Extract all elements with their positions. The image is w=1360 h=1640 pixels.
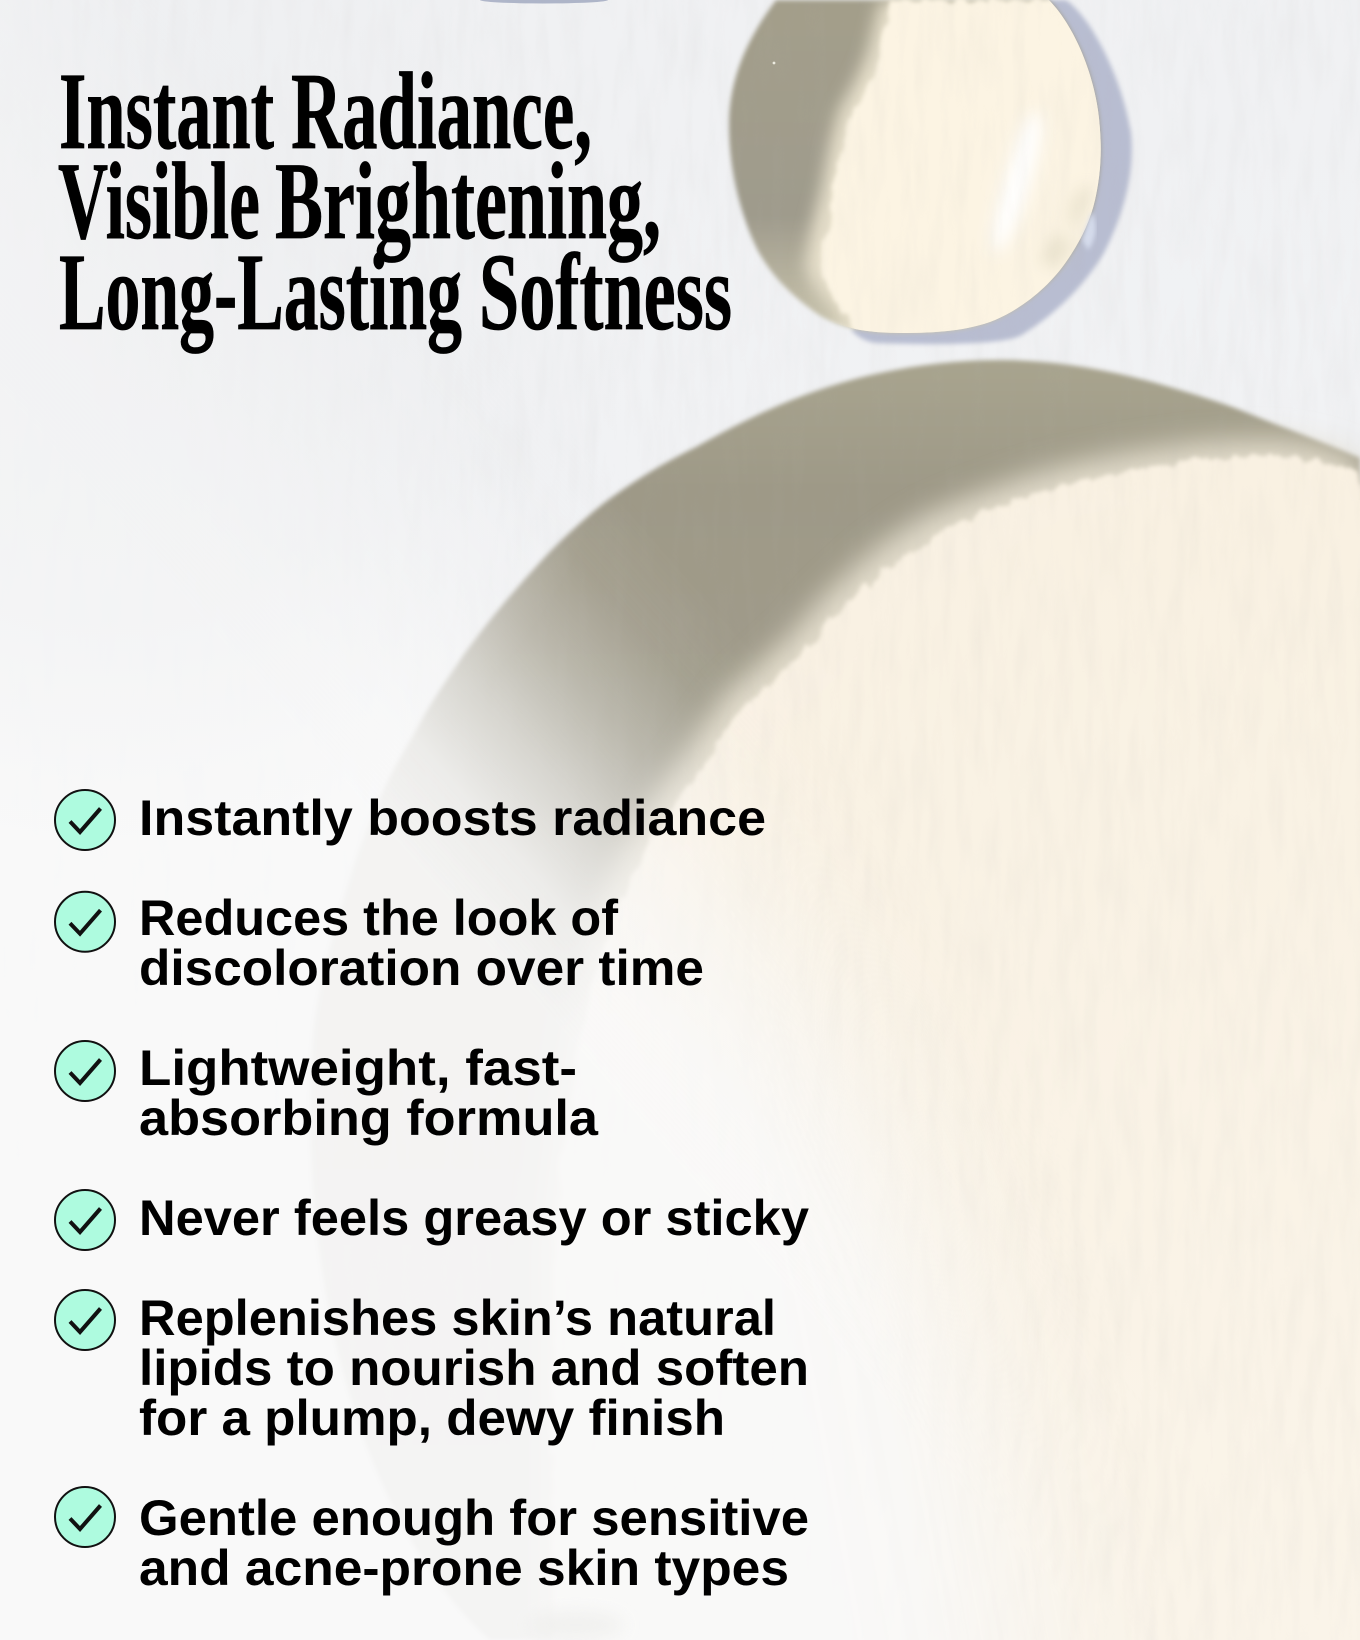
benefit: reduces discoloration: Reduces the look of	[139, 890, 618, 946]
small droplet	[729, 0, 1132, 350]
title: Softness	[479, 231, 732, 353]
white fade overlay	[0, 542, 1022, 1640]
title	[58, 50, 732, 353]
soft transition into lit area	[540, 440, 1360, 1640]
benefit: reduces discoloration: discoloration over time	[139, 940, 704, 996]
benefit: instantly boosts radiance: Instantly boosts radiance	[139, 790, 766, 846]
benefit: replenishes lipids: Replenishes skin’s natural	[139, 1290, 776, 1346]
highlight	[992, 112, 1041, 252]
icon: check badge	[55, 1041, 115, 1101]
shadow glint	[1082, 212, 1095, 250]
benefit: replenishes lipids	[55, 1290, 809, 1446]
lit side of small droplet	[805, 0, 1120, 350]
title: Radiance,	[291, 50, 592, 172]
icon: check badge	[55, 892, 115, 952]
benefit: replenishes lipids: lipids to nourish and soften	[139, 1340, 809, 1396]
benefit: gentle for sensitive skin: Gentle enough for sensitive	[139, 1490, 809, 1546]
title: Visible	[58, 140, 260, 262]
icon: check badge	[55, 790, 115, 850]
top edge droplet shadow	[480, 0, 608, 4]
droplet inner shading	[1038, 185, 1092, 268]
specks	[773, 62, 775, 64]
icon: check badge	[55, 1290, 115, 1350]
large droplet	[310, 360, 1360, 1640]
lit cream area body	[600, 490, 1360, 1640]
benefit: lightweight formula	[55, 1040, 599, 1146]
benefit: never greasy: Never feels greasy or sticky	[139, 1190, 809, 1246]
icon: check badge	[55, 1190, 115, 1250]
lit cream area edge	[553, 456, 1360, 1640]
benefit: gentle for sensitive skin	[55, 1487, 809, 1596]
icon: check badge	[55, 1487, 115, 1547]
title: Brightening,	[275, 140, 661, 262]
title: Instant	[59, 50, 274, 172]
benefit: lightweight formula: Lightweight, fast-	[139, 1040, 577, 1096]
benefit: gentle for sensitive skin: and acne-prone skin types	[139, 1540, 789, 1596]
title: Long-Lasting	[59, 231, 462, 353]
benefit: reduces discoloration	[55, 890, 704, 996]
faint lower droplet edge	[528, 1611, 624, 1639]
benefit: replenishes lipids: for a plump, dewy finish	[139, 1390, 725, 1446]
benefit: lightweight formula: absorbing formula	[139, 1090, 599, 1146]
